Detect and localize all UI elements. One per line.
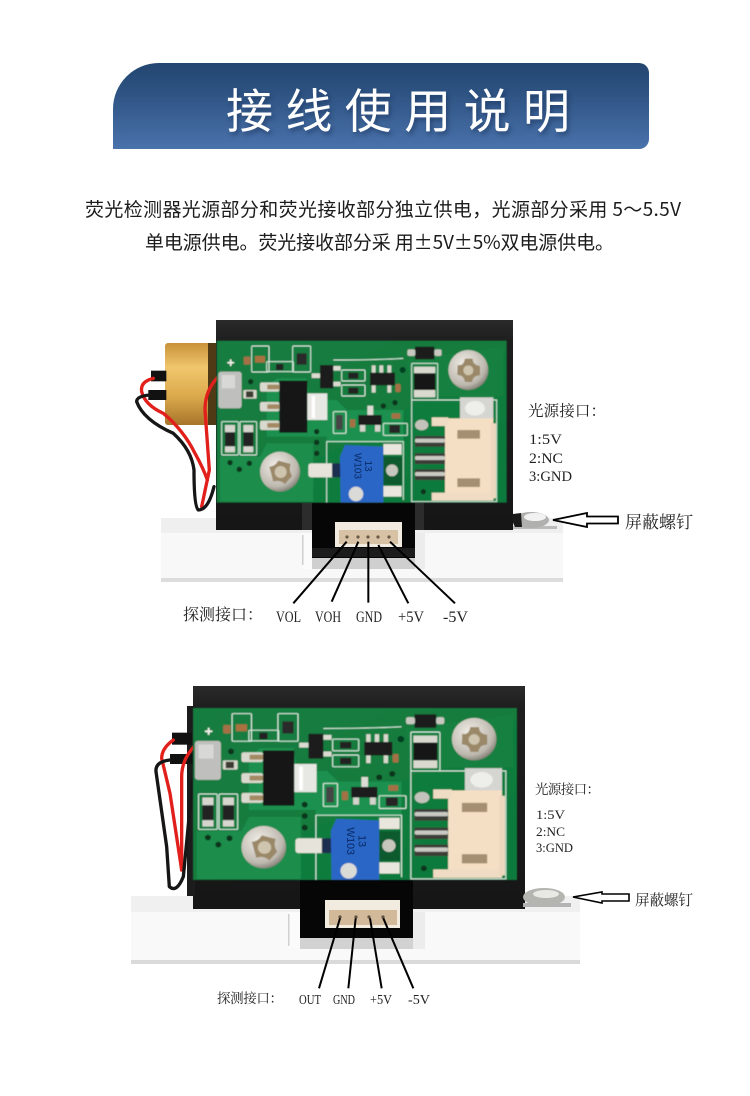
pin leader lines [319, 918, 413, 988]
probe interface labels [217, 990, 430, 1008]
potentiometer code: W103 [344, 827, 356, 855]
pin 3: 3:GND [536, 840, 573, 855]
pin 1: 1:5V [529, 432, 562, 448]
label +5V: +5V [398, 609, 424, 626]
connecting wires [137, 371, 218, 510]
label -5V: -5V [443, 609, 468, 626]
screw label: 屏蔽螺钉 [625, 513, 693, 532]
device diagram 2 [131, 686, 693, 1008]
green circuit board [193, 708, 517, 880]
label VOL: VOL [276, 609, 301, 626]
shield screw [512, 512, 557, 529]
label GND: GND [356, 609, 382, 626]
arrow to screw [573, 892, 629, 903]
probe connector [325, 900, 400, 928]
title: 接线使用说明 [226, 73, 582, 142]
label: probe interface: 探测接口： [183, 606, 263, 624]
arrow to screw [553, 513, 618, 527]
potentiometer marking: 13 [356, 835, 368, 847]
aluminium rail [131, 896, 580, 964]
intro text block [85, 195, 681, 255]
pin 2: 2:NC [529, 451, 563, 467]
green circuit board [217, 341, 507, 503]
light source interface labels [528, 402, 606, 485]
light source heading: 光源接口： [528, 402, 606, 420]
pin 2: 2:NC [536, 824, 565, 839]
light source heading: 光源接口： [535, 781, 600, 797]
aluminium rail [161, 518, 563, 582]
pin 3: 3:GND [529, 469, 572, 485]
gold laser cylinder [165, 343, 216, 425]
light source interface labels [535, 781, 600, 855]
label OUT: OUT [299, 993, 321, 1008]
label: probe interface: 探测接口： [217, 990, 283, 1006]
laser module housing [216, 320, 513, 569]
laser module housing [187, 686, 525, 949]
probe connector [335, 522, 402, 547]
device diagram 1 [137, 320, 693, 626]
label -5V: -5V [408, 993, 430, 1008]
label +5V: +5V [370, 993, 392, 1008]
probe interface labels [183, 606, 468, 626]
pin 1: 1:5V [536, 807, 566, 822]
intro line 2: 单电源供电。荧光接收部分采 用±5V±5%双电源供电。 [145, 228, 614, 255]
connecting wires [156, 733, 194, 889]
shield screw [523, 888, 571, 907]
potentiometer code: W103 [351, 453, 362, 479]
intro line 1: 荧光检测器光源部分和荧光接收部分独立供电，光源部分采用 5～5.5V [85, 195, 681, 222]
pin leader lines [293, 542, 455, 603]
label VOH: VOH [315, 609, 341, 626]
label GND: GND [333, 993, 355, 1008]
banner heading [113, 63, 649, 149]
screw label: 屏蔽螺钉 [635, 891, 693, 909]
potentiometer marking: 13 [362, 460, 373, 472]
